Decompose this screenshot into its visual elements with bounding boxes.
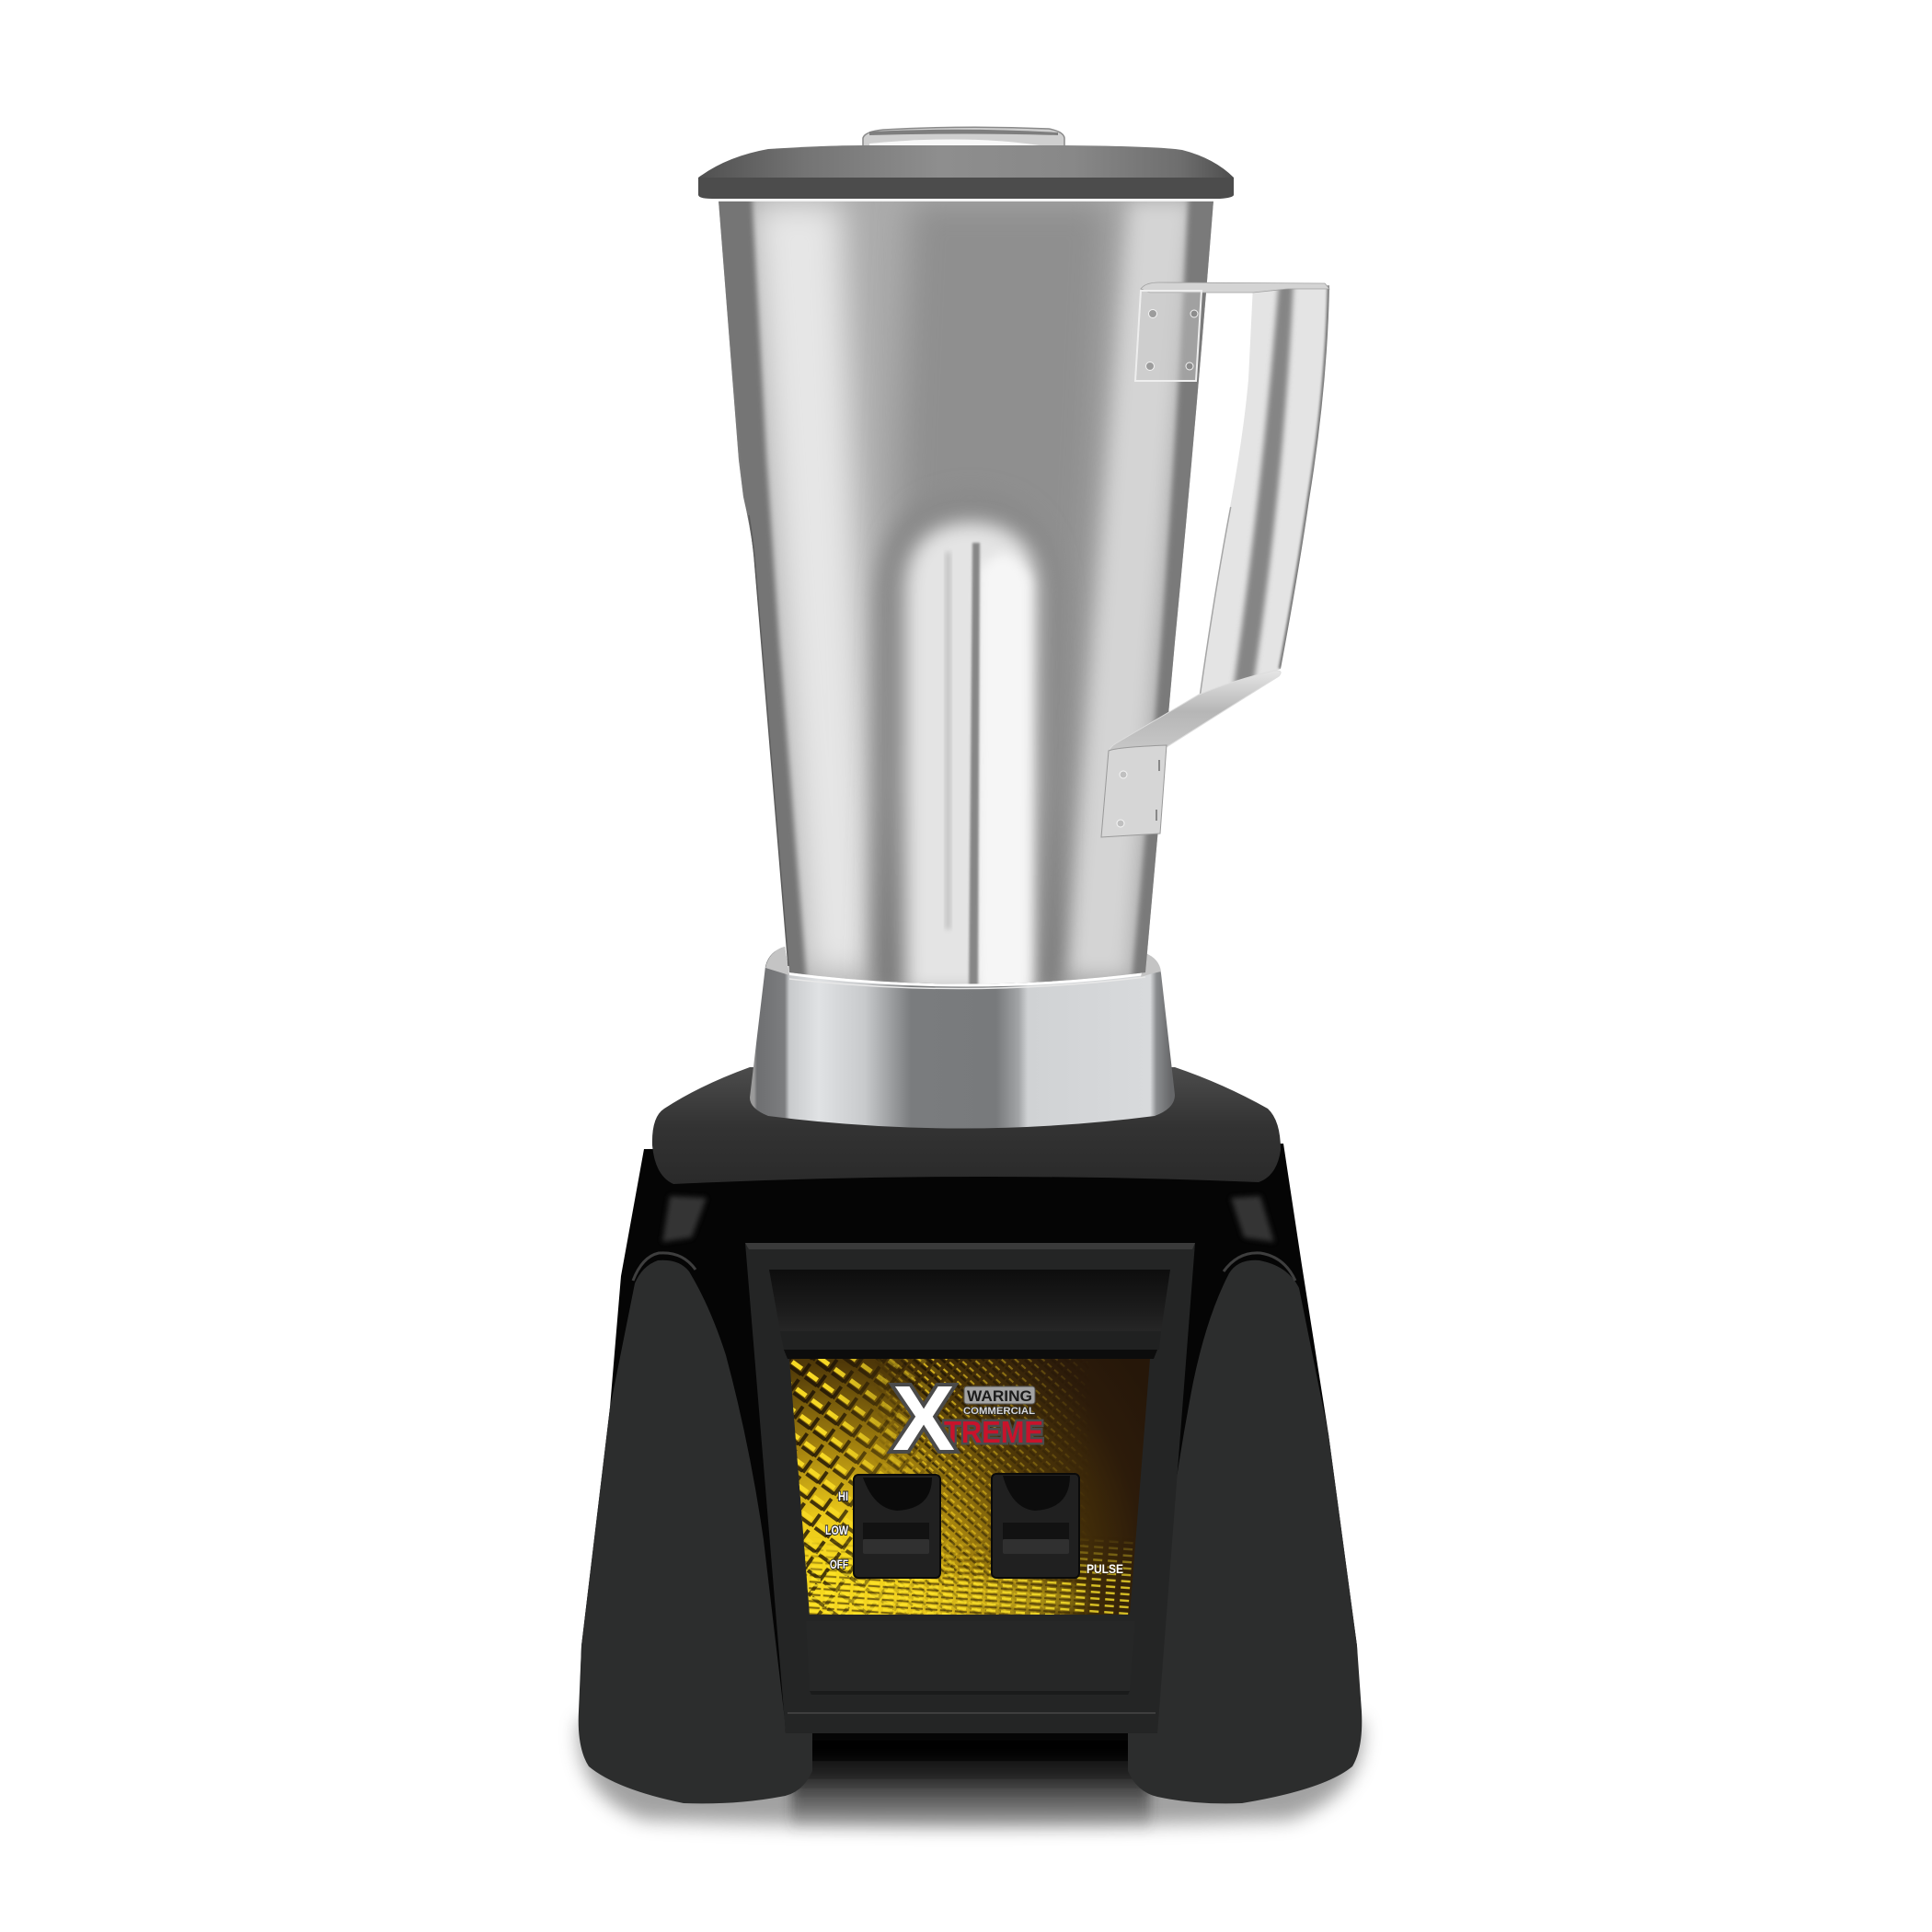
ground shadow xyxy=(579,1720,1363,1833)
switch label: HI: HI xyxy=(838,1489,848,1503)
switch label: LOW: LOW xyxy=(825,1523,849,1537)
handle xyxy=(1101,276,1343,837)
switch label: OFF: OFF xyxy=(830,1557,848,1571)
jar: reflection right lobe xyxy=(977,554,1030,994)
right foot xyxy=(1128,1253,1362,1803)
jar: central reflection xyxy=(905,522,1038,994)
waring badge xyxy=(964,1386,1035,1404)
blender base body xyxy=(579,1144,1360,1739)
brand logo: Waring Commercial Xtreme: X xyxy=(892,1367,955,1470)
switch label: PULSE: PULSE xyxy=(1087,1561,1123,1576)
rubber top gasket of base xyxy=(652,1067,1281,1184)
brand logo: Waring Commercial Xtreme: COMMERCIAL xyxy=(963,1406,1035,1417)
panel lower recess xyxy=(806,1621,1135,1691)
jar: right dark edge xyxy=(1130,201,1213,974)
jar: dark line xyxy=(969,543,980,994)
handle: upper bracket xyxy=(1135,291,1202,381)
panel upper recess xyxy=(769,1270,1170,1331)
handle: grip xyxy=(1200,285,1329,694)
brand logo: Waring Commercial Xtreme: TREME xyxy=(944,1415,1043,1449)
rocker switch: pulse xyxy=(992,1474,1079,1578)
handle: lower arm xyxy=(1109,671,1281,753)
rocker switch: speed xyxy=(854,1475,940,1578)
brand logo: Waring Commercial Xtreme xyxy=(892,1367,1043,1470)
jar: left edge highlight xyxy=(749,515,788,966)
steel jar collar xyxy=(750,947,1175,1128)
jar: centre dark area xyxy=(879,201,1109,975)
control panel housing xyxy=(745,1243,1195,1733)
illustration: stainless steel blender xyxy=(567,127,1374,1839)
jar: thin reflection line xyxy=(946,552,950,929)
handle: lower bracket xyxy=(1101,745,1167,837)
jar: halo around reflection xyxy=(874,489,1065,994)
panel sill xyxy=(780,1331,1161,1350)
glossy highlight: right shoulder xyxy=(1231,1196,1274,1242)
control label artwork xyxy=(782,1352,1159,1619)
jar: left dark edge xyxy=(713,193,807,984)
jar: right light band xyxy=(1067,201,1192,975)
stainless jar body xyxy=(708,193,1224,1003)
brand logo: Waring Commercial Xtreme: WARING xyxy=(967,1387,1032,1405)
left foot xyxy=(579,1253,812,1803)
jar: left light band xyxy=(752,201,876,975)
handle: top bar xyxy=(1141,282,1329,293)
lid knob xyxy=(863,127,1064,149)
glossy highlight: left shoulder xyxy=(662,1196,707,1242)
lid xyxy=(698,145,1234,201)
